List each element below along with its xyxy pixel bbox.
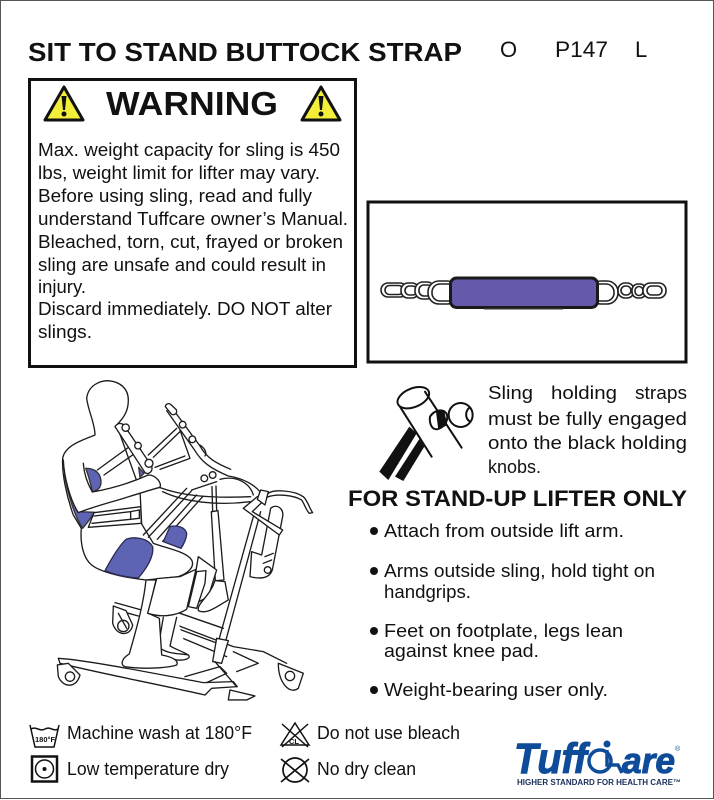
instruction: sling straps: Sling — [488, 382, 533, 403]
instruction: sling straps: straps — [635, 382, 687, 403]
instruction list — [370, 520, 655, 700]
far foot on plate — [198, 581, 228, 612]
care instructions: No dry clean — [317, 758, 416, 779]
blue sling: far thigh pad — [163, 526, 187, 548]
panel: product image — [368, 202, 686, 362]
warning text: lbs, weight limit for lifter may vary. — [38, 162, 320, 183]
warning text — [38, 139, 348, 342]
centre wheel — [228, 690, 255, 700]
logo: Tuffcare: are — [622, 740, 675, 781]
blue sling: thigh pad — [105, 538, 153, 578]
knee pad — [148, 569, 196, 616]
product code row: L — [635, 37, 647, 62]
instruction: sling straps: holding — [551, 382, 617, 403]
instruction: sling straps: must be fully engaged — [488, 408, 687, 429]
main base rail — [58, 658, 237, 695]
instruction: sling straps — [488, 382, 687, 477]
near lower leg and foot — [122, 580, 177, 668]
instruction: sling straps: onto the black holding — [488, 432, 687, 453]
near hanger bar — [115, 424, 152, 473]
logo: Tuffcare: Tuff — [514, 735, 590, 783]
icon: wash tub — [30, 725, 59, 747]
icon: right warning triangle — [302, 87, 340, 120]
far hanger straps — [148, 428, 190, 469]
instruction list: Feet on footplate, legs lean — [384, 620, 623, 641]
care instructions — [30, 722, 460, 782]
front-right wheel — [278, 663, 303, 690]
warning heading: WARNING — [106, 85, 278, 122]
icon: no bleach: CL — [289, 737, 299, 746]
handle — [243, 497, 283, 535]
warning text: Discard immediately. DO NOT alter — [38, 298, 332, 319]
instruction list: against knee pad. — [384, 640, 539, 661]
actuator — [211, 511, 224, 581]
panel: warning — [30, 80, 356, 366]
battery box — [250, 506, 283, 578]
foot plate — [190, 557, 217, 607]
instruction list: Weight-bearing user only. — [384, 679, 608, 700]
logo: Tuffcare: HIGHER STANDARD FOR HEALTH CARE™ — [517, 778, 681, 787]
mast — [219, 512, 261, 640]
warning text: injury. — [38, 276, 86, 297]
base rails behind — [175, 613, 287, 672]
product code row — [500, 37, 647, 62]
strap pad — [450, 278, 598, 308]
product code row: P147 — [555, 37, 608, 62]
warning text: Max. weight capacity for sling is 450 — [38, 139, 340, 160]
warning text: Before using sling, read and fully — [38, 185, 313, 206]
care instructions: Low temperature dry — [67, 758, 230, 779]
illustration: patient in stand-up lifter — [57, 381, 313, 700]
arm — [63, 460, 160, 513]
lower straps to lifter — [143, 488, 203, 541]
icon: wheelchair user — [589, 740, 622, 773]
title: SIT TO STAND BUTTOCK STRAP — [28, 37, 462, 67]
product code row: O — [500, 37, 517, 62]
rear wheel — [113, 603, 142, 634]
lifter arm — [167, 406, 261, 493]
icon: no dry clean — [281, 758, 309, 782]
front-left wheel — [57, 663, 80, 685]
instruction list: Arms outside sling, hold tight on — [384, 560, 655, 581]
icon: no bleach — [281, 723, 309, 747]
icon: wash tub: 180°F — [35, 735, 56, 744]
warning text: understand Tuffcare owner’s Manual. — [38, 208, 348, 229]
heading: lifter only: FOR STAND-UP LIFTER ONLY — [348, 486, 687, 511]
icon: holding knob — [379, 383, 473, 481]
instruction list: Attach from outside lift arm. — [384, 520, 624, 541]
far leg — [158, 617, 189, 660]
strap loops — [381, 281, 666, 304]
waist strap — [88, 507, 141, 527]
blue sling: chest — [86, 468, 101, 492]
body outline — [63, 381, 193, 580]
sling straps to chest — [97, 443, 141, 475]
care instructions: Do not use bleach — [317, 722, 460, 743]
icon: left warning triangle — [45, 87, 83, 120]
warning text: slings. — [38, 321, 92, 342]
blue sling: back — [64, 474, 95, 528]
logo: Tuffcare: ® — [675, 745, 681, 753]
instruction: sling straps: knobs. — [488, 456, 541, 477]
logo: Tuffcare — [514, 735, 681, 787]
instruction list: handgrips. — [384, 581, 471, 602]
icon: tumble dry low — [32, 756, 57, 782]
warning text: Bleached, torn, cut, frayed or broken — [38, 231, 343, 252]
warning text: sling are unsafe and could result in — [38, 254, 326, 275]
care instructions: Machine wash at 180°F — [67, 722, 252, 743]
front bar — [159, 478, 253, 503]
